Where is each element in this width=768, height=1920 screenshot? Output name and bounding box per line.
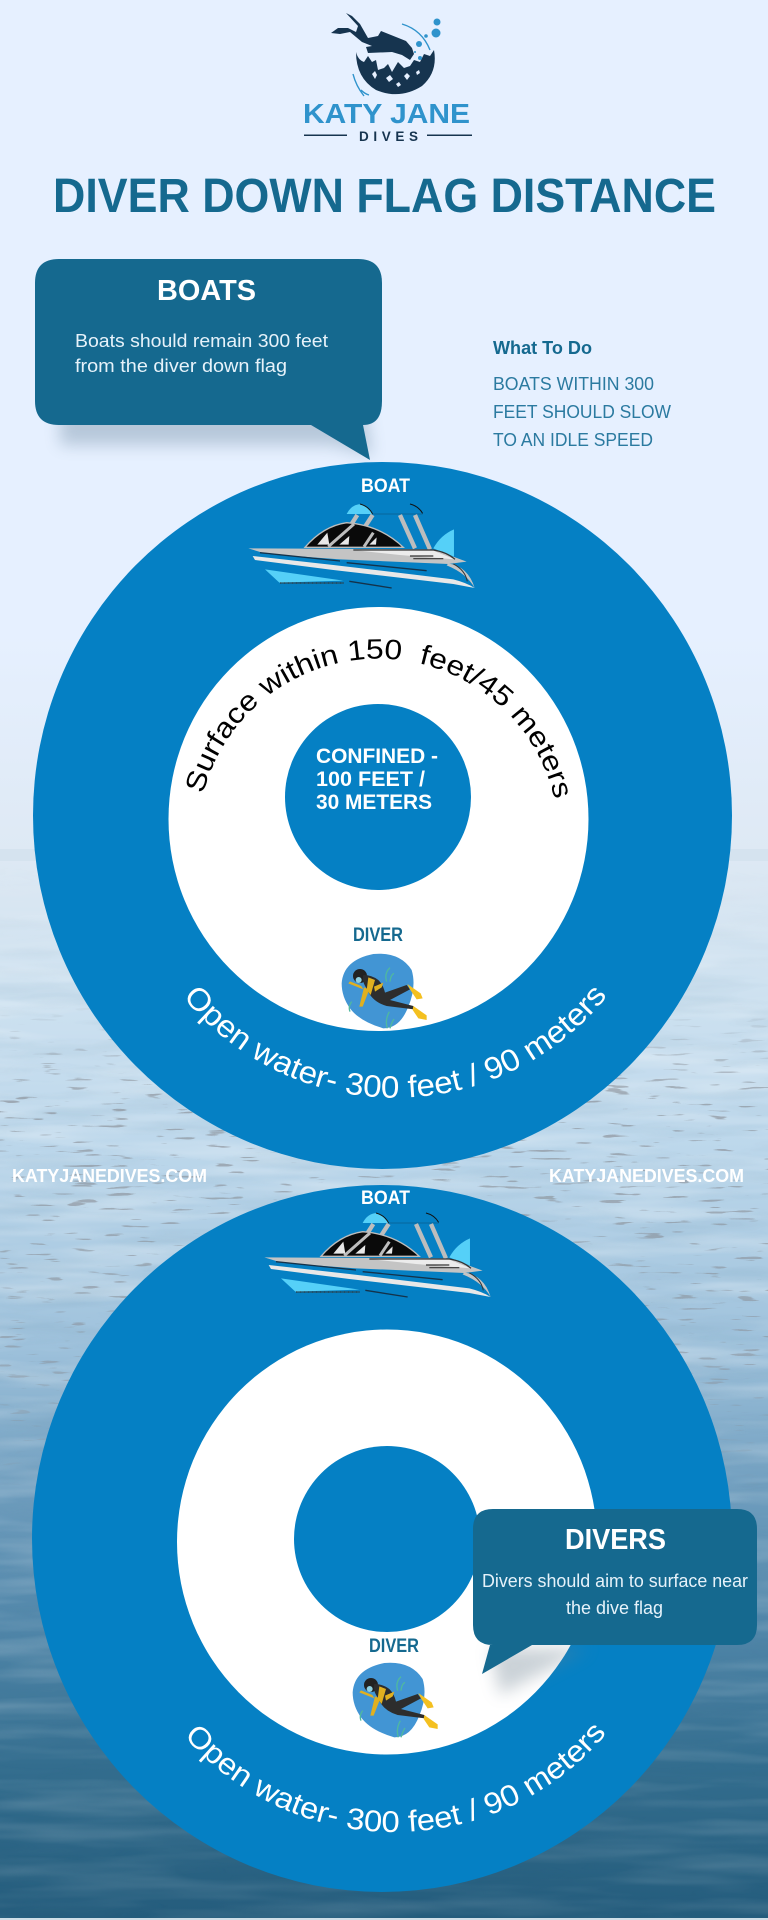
icon: diver [342,954,427,1028]
callout heading: BOATS [157,275,256,307]
callout body: the dive flag [566,1597,663,1618]
callout body: Divers should aim to surface near [482,1570,748,1591]
label: diver: DIVER [353,924,403,946]
middle circle: surface within 150 feet [168,607,588,1031]
icon: globe with coral [353,24,435,96]
callout: boats [35,259,382,460]
curved text: open water 300 feet: Open water- 300 feet / 90 meters [188,988,605,1098]
logo: Katy Jane Dives [303,13,472,144]
icon: boat [264,1213,491,1297]
callout body [75,330,328,376]
callout body [482,1570,748,1618]
title: DIVER DOWN FLAG DISTANCE [53,170,716,223]
callout body: from the diver down flag [75,355,287,376]
watermark right: KATYJANEDIVES.COM [549,1165,744,1186]
text: confined 100 feet 30 meters: 100 FEET / [316,768,425,791]
icon: bubbles [414,18,440,60]
outer circle: open water 300 feet [33,462,732,1169]
background: sky fading to sea [0,796,768,1920]
watermark left: KATYJANEDIVES.COM [12,1165,207,1186]
body: FEET SHOULD SLOW [493,401,671,422]
inner circle: confined 100 feet [285,704,471,890]
label: boat: BOAT [361,475,410,497]
label: diver: DIVER [369,1635,419,1657]
text block: what to do [493,337,671,450]
callout: divers [473,1509,757,1695]
icon: boat [248,504,475,588]
circle diagram 1: boats and distances [33,462,732,1169]
callout body: Boats should remain 300 feet [75,330,328,351]
outer circle: open water 300 feet [32,1185,732,1892]
callout heading: DIVERS [565,1524,666,1556]
curved text: surface within 150 feet: Surface within 150 feet/45 meters [186,639,568,798]
inner circle [294,1446,480,1632]
text: confined 100 feet 30 meters: 30 METERS [316,791,432,814]
icon: diver [353,1663,438,1737]
label: boat: BOAT [361,1187,410,1209]
curved text: open water 300 feet: Open water- 300 feet / 90 meters [188,1726,604,1832]
body: TO AN IDLE SPEED [493,429,653,450]
logo name: KATY JANE [303,98,470,129]
text: confined 100 feet 30 meters [316,745,438,814]
middle circle [177,1330,597,1754]
heading: What To Do [493,337,592,358]
text: confined 100 feet 30 meters: CONFINED - [316,745,438,768]
body [493,373,671,450]
logo sub name: DIVES [359,129,418,144]
icon: diver silhouette [331,13,414,60]
body: BOATS WITHIN 300 [493,373,654,394]
circle diagram 2: divers and distances [32,1185,731,1892]
